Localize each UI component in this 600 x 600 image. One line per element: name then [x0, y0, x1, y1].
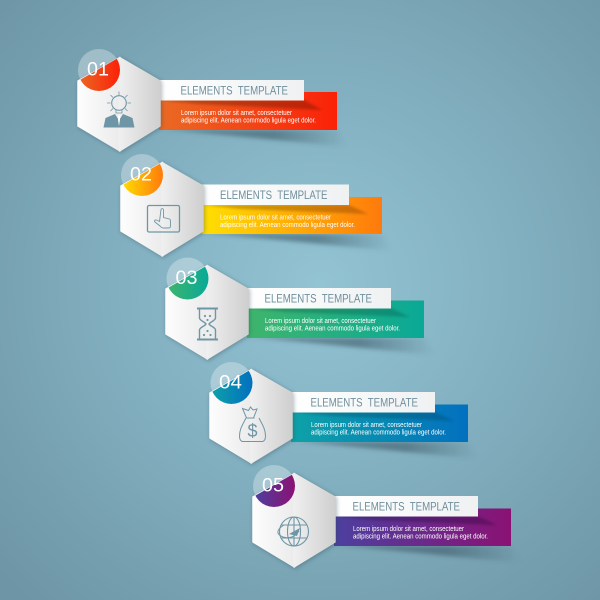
icon: money bag: $ [247, 421, 258, 441]
band inner shadow 4 [291, 412, 454, 421]
lorem text 1: Lorem ipsum dolor sit amet, consectetuer [181, 110, 293, 117]
band inner shadow 3 [247, 308, 410, 317]
heading 1: ELEMENTS TEMPLATE [180, 84, 288, 98]
icon: globe with plane [278, 517, 308, 546]
heading 2: ELEMENTS TEMPLATE [220, 188, 328, 202]
number badge 1 [78, 49, 120, 91]
heading 4: ELEMENTS TEMPLATE [310, 396, 418, 410]
lorem text 3: Lorem ipsum dolor sit amet, consectetuer [265, 318, 377, 325]
hexagon 1 [78, 58, 160, 151]
white title banner 1 [159, 80, 304, 100]
icon: hourglass [197, 308, 218, 340]
lorem text 4: Lorem ipsum dolor sit amet, consectetuer [311, 422, 423, 429]
hexagon 4 [210, 370, 292, 463]
colour band 4 [291, 404, 468, 442]
hexagon 2 [121, 162, 203, 256]
white title banner 4 [291, 392, 435, 412]
number badge 4 [210, 362, 252, 404]
heading 3: ELEMENTS TEMPLATE [264, 292, 372, 306]
band inner shadow 5 [334, 516, 497, 525]
white title banner 5 [334, 496, 478, 516]
cast shadow 1 [160, 129, 348, 147]
colour band 2 [202, 197, 382, 234]
band inner shadow 2 [202, 205, 368, 214]
icon: money bag [240, 407, 266, 442]
colour band 3 [247, 300, 424, 338]
band inner shadow 1 [159, 100, 322, 110]
lorem text 3: adipiscing elit. Aenean commodo ligula eget dolor. [265, 326, 400, 332]
white title banner 3 [247, 288, 391, 308]
hexagon 3 [166, 266, 248, 359]
number badge 5: 05 [262, 474, 284, 496]
lorem text 2: adipiscing elit. Aenean commodo ligula eget dolor. [220, 222, 355, 229]
step 2 [121, 154, 393, 256]
lorem text 5: adipiscing elit. Aenean commodo ligula eget dolor. [353, 534, 488, 540]
number badge 3 [166, 258, 208, 300]
cast shadow 4 [292, 441, 479, 459]
number badge 5 [253, 465, 295, 507]
icon: bulb head businessman [104, 92, 134, 128]
lorem text 5: Lorem ipsum dolor sit amet, consectetuer [353, 526, 465, 533]
number badge 2 [121, 154, 163, 196]
lorem text 2: Lorem ipsum dolor sit amet, consectetuer [220, 214, 332, 222]
white title banner 2 [202, 184, 349, 205]
step 4 [210, 362, 479, 463]
number badge 2: 02 [130, 164, 152, 186]
number badge 3: 03 [176, 267, 198, 289]
cast shadow 5 [335, 545, 522, 563]
heading 5: ELEMENTS TEMPLATE [352, 500, 460, 514]
cast shadow 2 [203, 233, 393, 251]
step 3 [166, 258, 435, 359]
step 5 [253, 465, 522, 567]
colour band 5 [334, 508, 511, 546]
hexagon 5 [253, 474, 335, 567]
cast shadow 3 [248, 337, 435, 355]
number badge 4: 04 [219, 372, 242, 394]
lorem text 1: adipiscing elit. Aenean commodo ligula eget dolor. [181, 118, 316, 124]
colour band 1 [159, 92, 337, 130]
lorem text 4: adipiscing elit. Aenean commodo ligula eget dolor. [311, 430, 446, 436]
number badge 1: 01 [87, 58, 109, 80]
icon: touch screen hand [148, 206, 180, 232]
step 1 [78, 49, 348, 151]
